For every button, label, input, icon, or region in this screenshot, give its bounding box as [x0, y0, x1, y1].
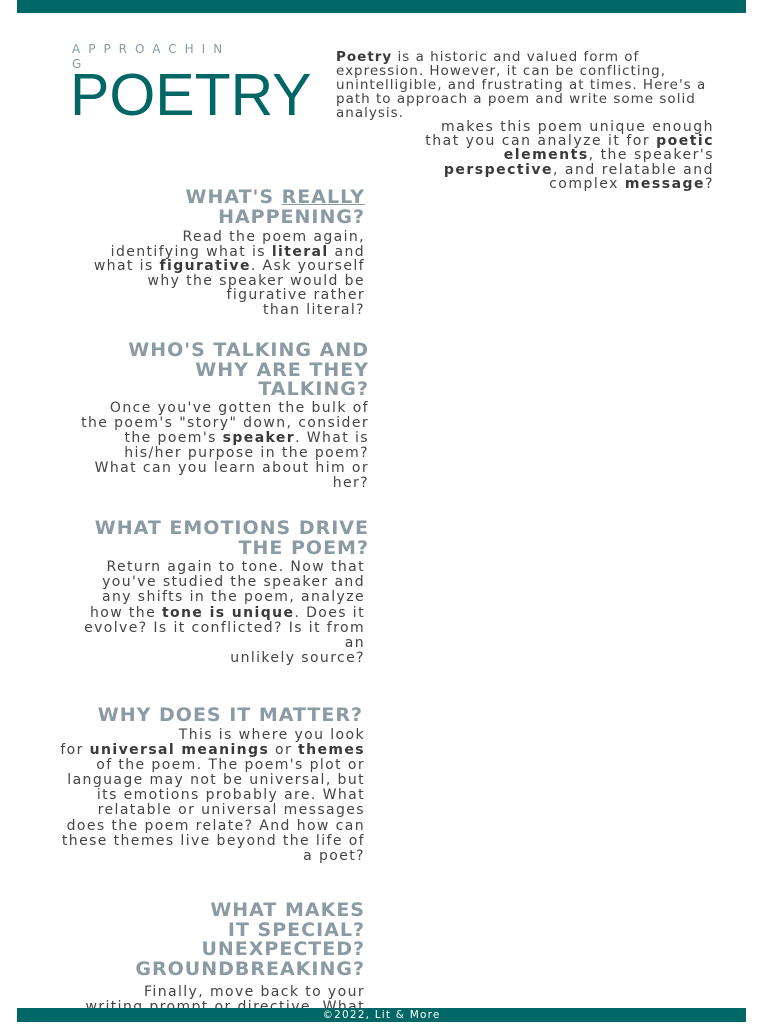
- heading 1: WHAT'S REALLY: [186, 186, 365, 208]
- text 4: language may not be universal, but: [67, 772, 365, 788]
- text 3: you've studied the speaker and: [102, 574, 365, 590]
- heading 1: [186, 186, 365, 228]
- heading 2: WHY ARE THEY: [195, 358, 369, 380]
- text 1: [94, 229, 365, 318]
- text 2: the poem's "story" down, consider: [81, 415, 369, 431]
- continuation text: that you can analyze it for poetic: [425, 133, 714, 149]
- text 4: a poet?: [303, 848, 365, 864]
- heading 4: WHY DOES IT MATTER?: [98, 704, 363, 726]
- text 1: what is figurative. Ask yourself: [94, 258, 365, 274]
- intro text: analysis.: [336, 105, 404, 121]
- continuation text: makes this poem unique enough: [441, 119, 714, 135]
- text 3: Return again to tone. Now that: [107, 559, 365, 575]
- text 3: [84, 559, 365, 666]
- heading 3: [95, 517, 369, 558]
- heading 1: HAPPENING?: [218, 206, 365, 228]
- intro text: Poetry is a historic and valued form of: [336, 49, 639, 65]
- heading 5: IT SPECIAL?: [228, 918, 365, 940]
- heading 2: TALKING?: [258, 378, 369, 400]
- kicker: approaching: [72, 42, 230, 71]
- heading 5: UNEXPECTED?: [201, 938, 365, 960]
- heading 2: [128, 339, 369, 400]
- continuation text: elements, the speaker's: [504, 147, 714, 163]
- text 1: why the speaker would be: [147, 273, 365, 289]
- intro text: path to approach a poem and write some solid: [336, 91, 696, 107]
- text 1: figurative rather: [226, 287, 365, 303]
- text 4: these themes live beyond the life of: [62, 833, 365, 849]
- continuation text: [425, 119, 714, 192]
- text 2: his/her purpose in the poem?: [124, 445, 369, 461]
- footer bar: ©2022, Lit & More: [322, 1009, 441, 1021]
- heading 3: WHAT EMOTIONS DRIVE: [95, 517, 369, 539]
- text 3: unlikely source?: [230, 650, 365, 666]
- text 1: than literal?: [263, 302, 365, 318]
- intro text: expression. However, it can be conflicting,: [336, 63, 666, 79]
- text 1: identifying what is literal and: [111, 244, 365, 260]
- continuation text: perspective, and relatable and: [444, 162, 714, 178]
- text 4: its emotions probably are. What: [97, 787, 365, 803]
- text 4: [60, 727, 365, 864]
- continuation text: complex message?: [549, 176, 714, 192]
- text 4: of the poem. The poem's plot or: [96, 757, 365, 773]
- heading 5: [135, 899, 365, 980]
- text 2: [81, 400, 369, 491]
- text 2: the poem's speaker. What is: [125, 430, 369, 446]
- text 3: an: [345, 635, 365, 651]
- kicker: approaching: APPROACHIN: [72, 42, 230, 56]
- text 3: evolve? Is it conflicted? Is it from: [84, 620, 365, 636]
- kicker: approaching: G: [72, 57, 89, 71]
- text 4: does the poem relate? And how can: [67, 818, 365, 834]
- text 4: for universal meanings or themes: [60, 742, 365, 758]
- text 4: relatable or universal messages: [98, 802, 365, 818]
- top bar: [17, 0, 746, 13]
- heading 3: THE POEM?: [239, 536, 369, 558]
- text 5: Finally, move back to your: [144, 984, 365, 1000]
- footer bar: [17, 1008, 746, 1022]
- heading 5: GROUNDBREAKING?: [135, 958, 365, 980]
- text 3: how the tone is unique. Does it: [90, 605, 365, 621]
- text 4: This is where you look: [179, 727, 365, 743]
- text 2: What can you learn about him or: [95, 460, 369, 476]
- text 5: writing prompt or directive. What: [85, 999, 365, 1015]
- title: POETRY: [70, 62, 312, 128]
- text 1: Read the poem again,: [183, 229, 365, 245]
- intro text: [336, 49, 706, 121]
- heading 2: WHO'S TALKING AND: [128, 339, 369, 361]
- text 2: her?: [333, 475, 369, 491]
- text 3: any shifts in the poem, analyze: [102, 589, 365, 605]
- heading 5: WHAT MAKES: [210, 899, 365, 921]
- text 2: Once you've gotten the bulk of: [110, 400, 369, 416]
- text 5: [85, 984, 365, 1015]
- intro text: unintelligible, and frustrating at times. Here's a: [336, 77, 706, 93]
